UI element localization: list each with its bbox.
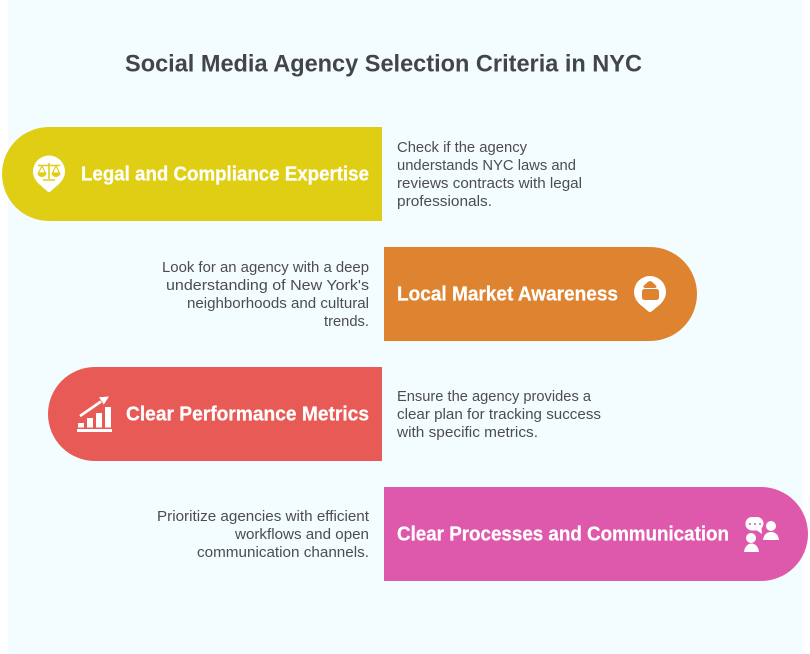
description: processes	[157, 509, 369, 561]
heading: legal: Legal and Compliance Expertise	[81, 164, 369, 186]
pill: legal	[2, 127, 382, 221]
icon: growth chart	[77, 396, 112, 432]
description: local: trends.	[324, 314, 369, 330]
description: processes: workflows and open	[234, 527, 369, 543]
description: legal: reviews contracts with legal	[397, 176, 582, 192]
description: legal	[397, 140, 582, 210]
panel: local market awareness	[162, 247, 697, 341]
heading: metrics: Clear Performance Metrics	[126, 404, 369, 426]
panel: clear processes and communication	[157, 487, 808, 581]
description: metrics: clear plan for tracking success	[397, 407, 601, 423]
description: legal: understands NYC laws and	[397, 158, 576, 174]
description: metrics: Ensure the agency provides a	[397, 389, 592, 405]
description: processes: Prioritize agencies with efficient	[157, 509, 369, 525]
icon: local pin	[634, 276, 666, 312]
heading: local: Local Market Awareness	[397, 284, 618, 306]
description: metrics	[396, 389, 601, 441]
description: local: Look for an agency with a deep	[162, 260, 369, 276]
heading: processes: Clear Processes and Communication	[397, 524, 729, 546]
description: local: neighborhoods and cultural	[187, 296, 369, 312]
description: processes: communication channels.	[197, 545, 369, 561]
description: local	[162, 260, 369, 330]
description: legal: Check if the agency	[397, 140, 528, 156]
description: legal: professionals.	[397, 194, 492, 210]
panel: clear performance metrics	[48, 367, 601, 461]
pill: metrics	[48, 367, 382, 461]
pill: processes	[384, 487, 808, 581]
panel: legal and compliance expertise	[2, 127, 582, 221]
icon: people talking	[744, 517, 779, 552]
icon: scales of justice pin	[33, 156, 65, 192]
pill: local	[384, 247, 697, 341]
title: Social Media Agency Selection Criteria in NYC	[125, 50, 642, 78]
description: local: understanding of New York's	[166, 278, 369, 294]
description: metrics: with specific metrics.	[396, 425, 538, 441]
